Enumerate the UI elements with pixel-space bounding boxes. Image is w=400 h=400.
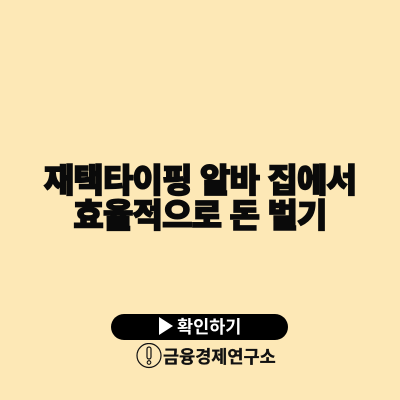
icon: exclamation circle xyxy=(136,343,162,368)
title: 효율적으로 돈 벌기 xyxy=(73,197,327,234)
icon: play triangle xyxy=(159,317,173,335)
button label: 확인하기 xyxy=(177,317,241,337)
title: 재택타이핑 알바 집에서 xyxy=(44,162,356,199)
title xyxy=(43,162,356,234)
button: confirm xyxy=(111,314,288,340)
brand name: 금융경제연구소 xyxy=(163,347,276,367)
brand row xyxy=(136,343,276,368)
